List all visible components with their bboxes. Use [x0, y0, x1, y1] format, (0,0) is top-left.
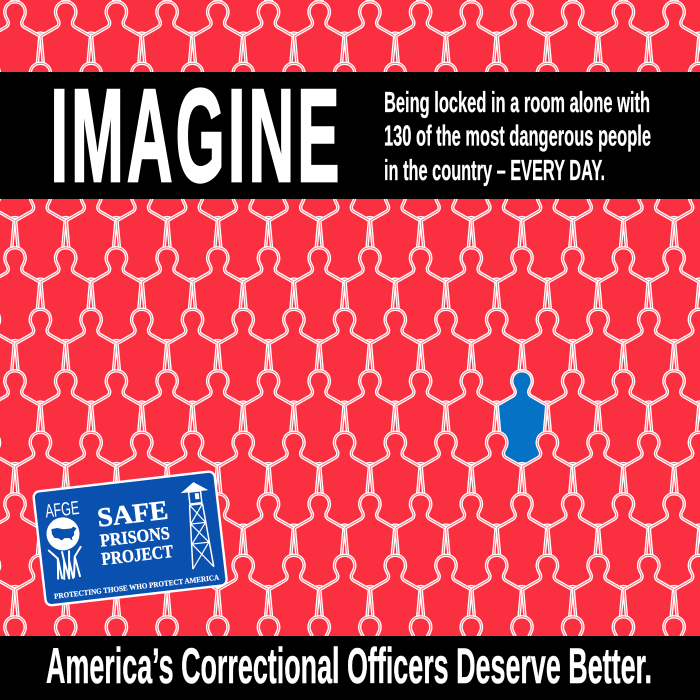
bottom black banner	[0, 636, 700, 700]
badge tagline: PROTECTING THOSE WHO PROTECT AMERICA	[54, 573, 220, 601]
icon: people holding up globe	[49, 547, 84, 580]
badge title: SAFE: SAFE	[96, 495, 170, 533]
blue figure	[497, 371, 547, 467]
badge title: PRISONS: PRISONS	[99, 523, 171, 551]
badge title: PROJECT: PROJECT	[100, 541, 174, 569]
icon: guard tower	[182, 482, 215, 569]
pattern of outlined figures, lower rows	[0, 432, 700, 700]
top black banner: IMAGINE	[50, 62, 342, 209]
text block: description	[384, 87, 651, 187]
badge: Safe Prisons Project	[33, 471, 227, 606]
pattern of outlined figures, upper rows	[0, 0, 700, 467]
AFGE label: AFGE	[44, 498, 80, 523]
icon: globe with USA map	[45, 516, 81, 552]
